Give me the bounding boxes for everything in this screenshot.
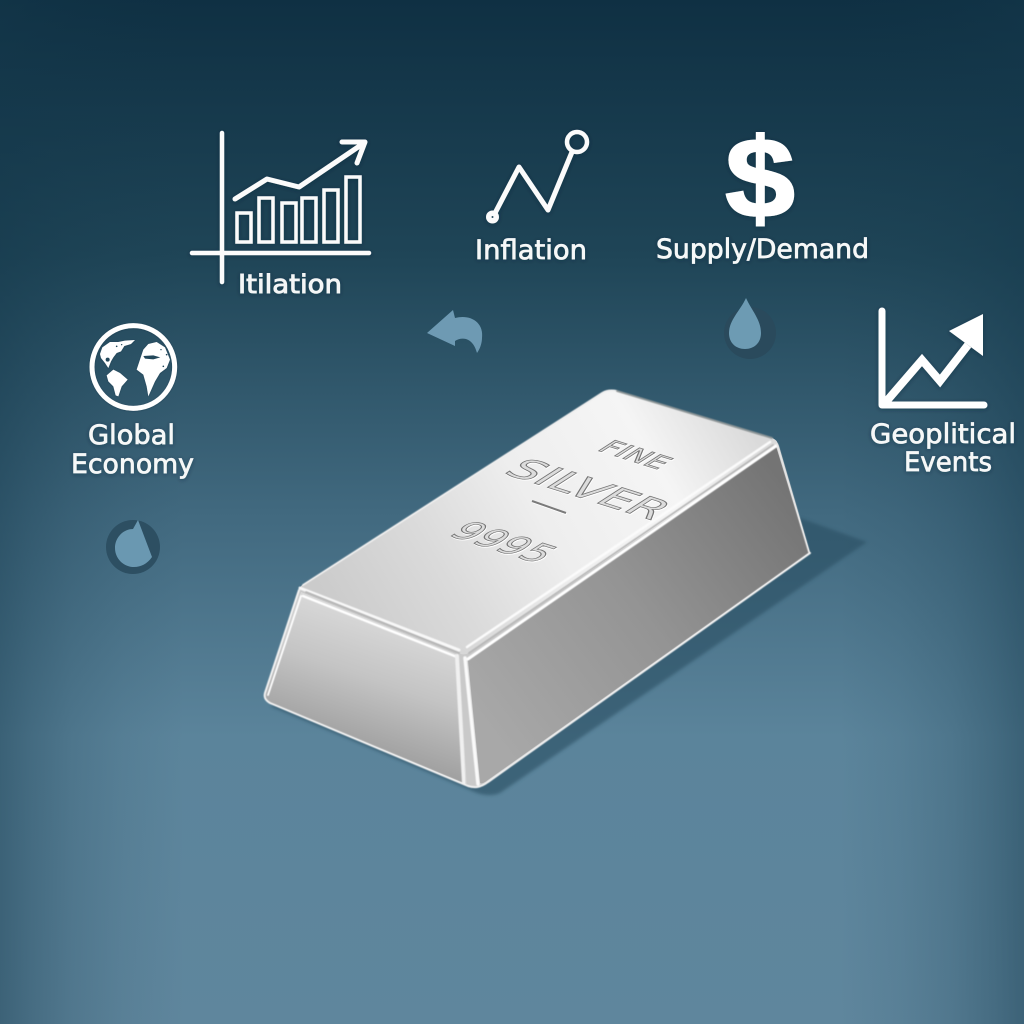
icon: geopolitical chart arrow xyxy=(882,311,984,405)
icon: curved arrow xyxy=(427,310,482,353)
label: Geoplitical Events: Geoplitical xyxy=(870,419,1016,450)
icon: dollar sign: $ xyxy=(725,116,795,242)
label: Geoplitical Events: Events xyxy=(904,447,992,478)
label: Global Economy xyxy=(71,420,194,480)
label: Supply/Demand: Supply/Demand xyxy=(656,234,869,265)
bar: right face xyxy=(468,446,809,783)
stamp: FINE: FINE xyxy=(590,437,679,474)
stamp: 9995: 9995 xyxy=(439,516,568,569)
label: Inflation: Inflation xyxy=(475,235,587,266)
icon: droplet lower left xyxy=(106,520,160,574)
icon: inflation line xyxy=(488,132,587,222)
label: Geoplitical Events xyxy=(870,419,1016,478)
bar: stamped text xyxy=(439,437,682,569)
icon: globe xyxy=(92,326,175,408)
bar: top face xyxy=(301,390,777,654)
silver bar shadow xyxy=(270,518,867,795)
icon: water drop xyxy=(724,298,776,359)
icon: bar chart with rising arrow xyxy=(192,133,369,282)
label: Global Economy: Economy xyxy=(71,449,194,480)
bar: base silhouette xyxy=(265,390,810,787)
bar: bevel highlights xyxy=(265,390,810,787)
label: Itilation: Itilation xyxy=(238,270,342,300)
stamp: SILVER: SILVER xyxy=(494,454,682,526)
bar: front face xyxy=(265,592,466,784)
stamp: dash xyxy=(532,501,566,513)
silver bar xyxy=(265,390,810,787)
label: Global Economy: Global xyxy=(88,420,175,451)
